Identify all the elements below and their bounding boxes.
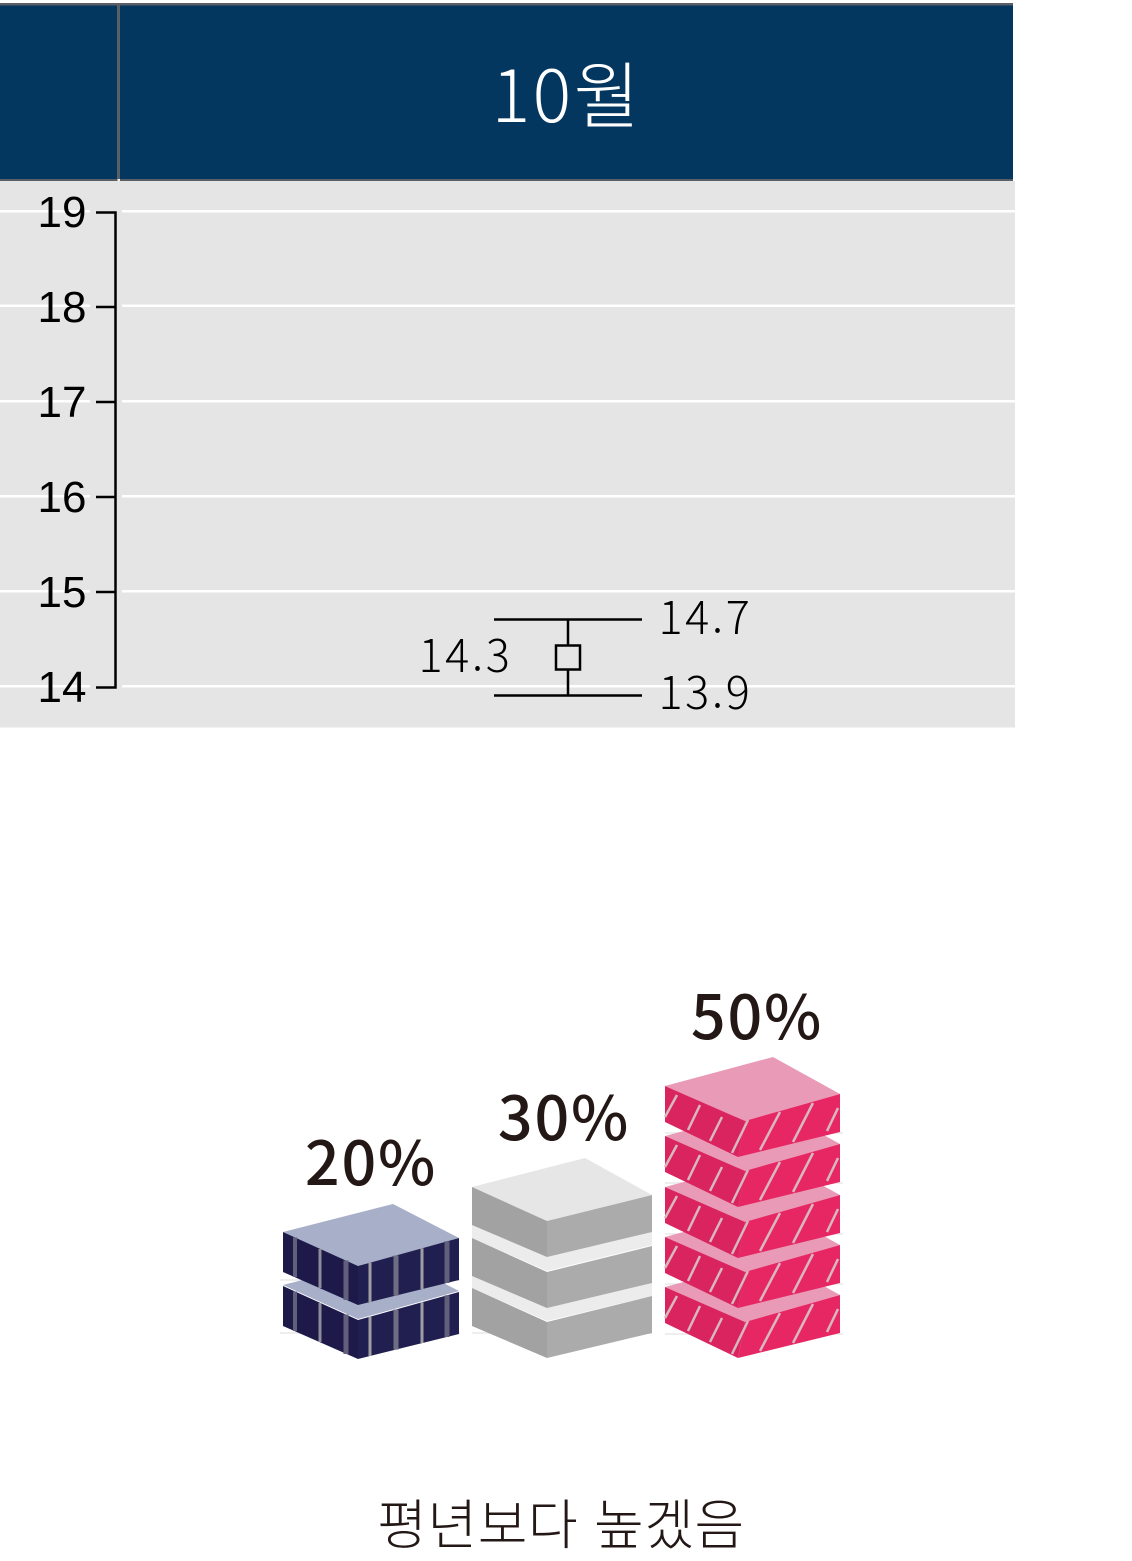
stack: 50 percent (665, 968, 843, 1358)
y axis labels: 16 (38, 473, 86, 522)
y axis with ticks (90, 204, 122, 694)
y axis labels: 19 (38, 188, 86, 237)
y axis labels (38, 188, 86, 712)
caption: 평년보다 높겠음 (377, 1481, 745, 1560)
label: 50%: 50% (691, 968, 823, 1057)
value label: upper: 14.7 (658, 582, 752, 647)
value label: lower: 13.9 (658, 657, 752, 722)
month heading: 10월 (492, 38, 642, 143)
y axis labels: 18 (38, 283, 86, 332)
label: 20%: 20% (305, 1114, 437, 1203)
stack: 30 percent (472, 1069, 652, 1358)
y axis labels: 15 (38, 568, 86, 617)
header band: month (0, 3, 1013, 181)
y axis labels: 14 (38, 663, 86, 712)
value label: mean: 14.3 (418, 620, 512, 685)
y axis labels: 17 (38, 378, 86, 427)
stack: 20 percent (280, 1114, 460, 1359)
range marker: 13.9 to 14.7 with mean 14.3 (494, 620, 642, 696)
label: 30%: 30% (498, 1069, 630, 1158)
chart panel: temperature range (0, 181, 1015, 728)
